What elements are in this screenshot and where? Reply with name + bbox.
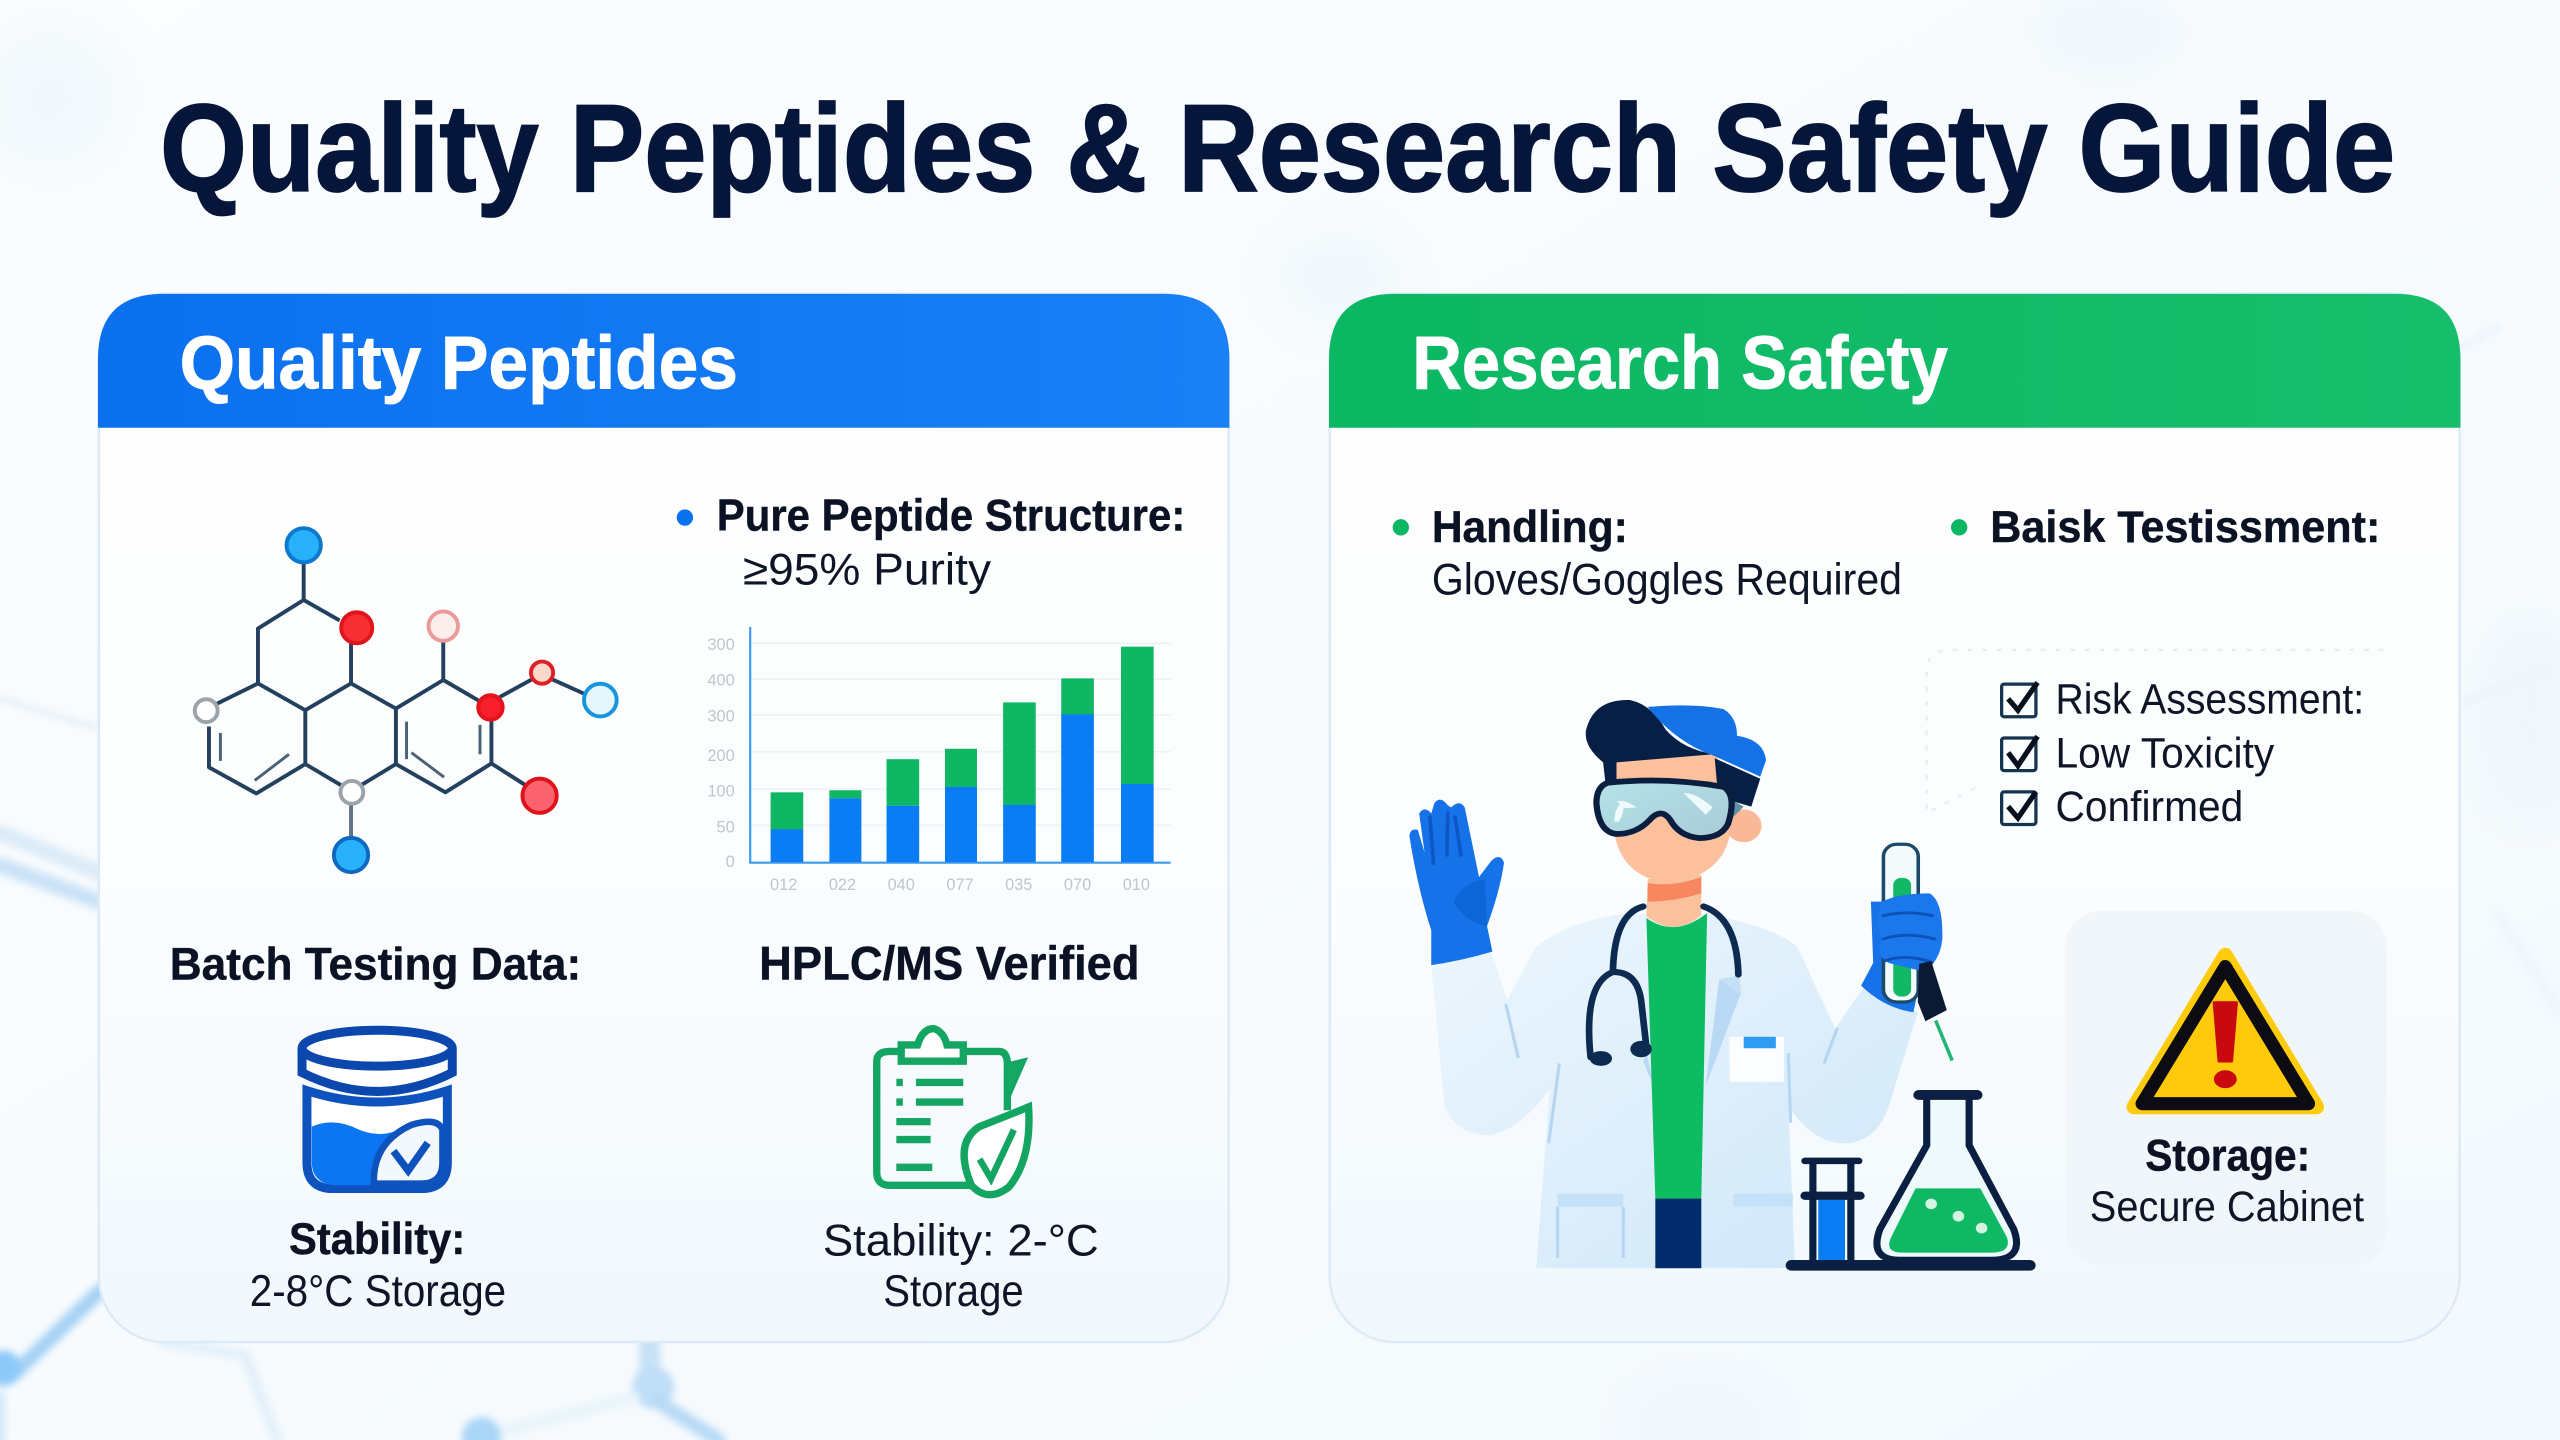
glove cuff on test tube arm xyxy=(1861,902,1922,1012)
bullet: handling xyxy=(1393,503,1902,604)
y axis labels: 0 xyxy=(726,853,735,871)
lab coat xyxy=(1431,914,1918,1268)
label: hplc/ms verified: HPLC/MS Verified xyxy=(759,938,1140,991)
bullet: pure peptide structure: ≥95% Purity xyxy=(743,545,991,594)
text: stability storage right xyxy=(823,1217,1099,1316)
icon: warning triangle xyxy=(2134,955,2317,1107)
raised glove xyxy=(1409,800,1504,965)
y axis labels: 300 xyxy=(707,708,735,726)
panel: research safety xyxy=(1329,294,2460,1342)
bench line xyxy=(1791,1252,2030,1278)
chest pocket xyxy=(1729,1037,1784,1082)
text: stability storage right: Stability: 2-°C xyxy=(823,1217,1099,1266)
checklist: Confirmed xyxy=(2056,783,2243,830)
hair xyxy=(1586,700,1715,782)
stethoscope xyxy=(1589,907,1738,1057)
y axis labels: 50 xyxy=(717,819,735,837)
x axis labels: 022 xyxy=(829,876,856,894)
bullet: handling: Handling: xyxy=(1432,503,1628,552)
text: storage: Storage: xyxy=(2145,1132,2310,1181)
bullet: pure peptide structure: Pure Peptide Structure: xyxy=(717,492,1185,541)
x axis labels: 070 xyxy=(1064,876,1091,894)
panel body xyxy=(1330,294,2460,1342)
conical flask xyxy=(1877,1095,2017,1260)
icon: vial with check xyxy=(302,1030,452,1189)
y axis labels: 400 xyxy=(707,672,735,690)
lower pockets xyxy=(1558,1194,1793,1207)
label: batch testing data: Batch Testing Data: xyxy=(170,939,581,990)
stacked bars xyxy=(771,647,1154,862)
goggles xyxy=(1730,799,1744,818)
head xyxy=(1726,809,1762,842)
panel header xyxy=(1329,294,2460,428)
test tube rack xyxy=(1805,1161,1860,1262)
gripping fingers xyxy=(1878,893,1942,971)
x axis labels xyxy=(770,876,1150,894)
panel header xyxy=(98,294,1229,428)
storage card xyxy=(2065,911,2387,1265)
x axis labels: 077 xyxy=(946,876,974,894)
x axis labels: 010 xyxy=(1123,876,1150,894)
panel heading: Quality Peptides xyxy=(180,321,738,405)
bullet: pure peptide structure xyxy=(677,492,1185,594)
y axis labels: 100 xyxy=(707,783,735,801)
pipette xyxy=(1918,961,1947,1021)
bar chart: batch testing xyxy=(707,627,1171,894)
text: stability storage left xyxy=(250,1215,506,1316)
y axis labels: 300 xyxy=(707,636,735,654)
checklist: Low Toxicity xyxy=(2056,729,2275,776)
test tube xyxy=(1883,844,1918,1002)
text: stability storage right: Storage xyxy=(883,1267,1024,1316)
text: stability storage left: 2-8°C Storage xyxy=(250,1267,506,1316)
neck xyxy=(1646,875,1701,927)
atoms xyxy=(195,528,617,872)
panel heading: Research Safety xyxy=(1412,321,1948,405)
molecule diagram xyxy=(195,528,617,872)
checklist: Risk Assessment: xyxy=(2056,675,2364,722)
panel body xyxy=(99,294,1229,1342)
shirt xyxy=(1646,913,1707,1199)
panel: quality peptides xyxy=(98,294,1229,1342)
text: secure cabinet: Secure Cabinet xyxy=(2090,1183,2364,1230)
dashed callout outline xyxy=(1927,650,2384,813)
checklist xyxy=(2002,675,2364,830)
bullet: basic testing: Baisk Testissment: xyxy=(1990,503,2380,552)
x axis labels: 035 xyxy=(1005,876,1032,894)
lapels xyxy=(1643,975,1741,1094)
illustration: scientist with lab glassware xyxy=(1409,700,2030,1268)
bullet: handling: Gloves/Goggles Required xyxy=(1432,555,1902,604)
y axis labels: 200 xyxy=(707,747,735,765)
x axis labels: 012 xyxy=(770,876,797,894)
x axis labels: 040 xyxy=(888,876,915,894)
text: stability storage left: Stability: xyxy=(289,1215,465,1264)
trousers xyxy=(1655,1199,1701,1268)
icon: clipboard with leaf xyxy=(877,1029,1029,1195)
y axis labels xyxy=(707,636,735,871)
